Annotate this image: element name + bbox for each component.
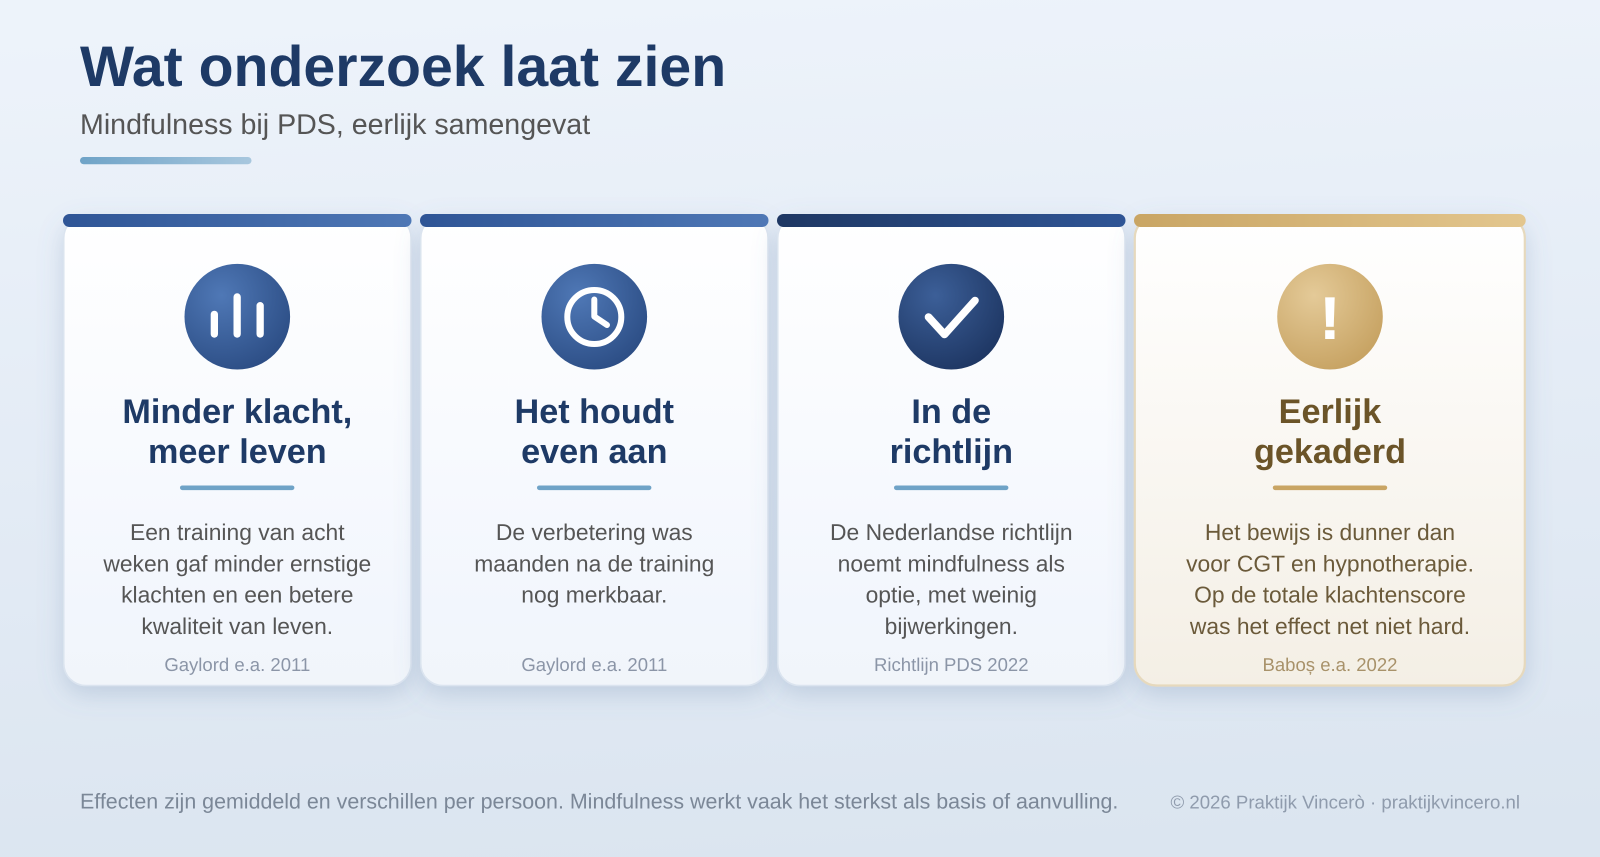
citation: Gaylord e.a. 2011	[164, 654, 310, 675]
body text: nog merkbaar.	[521, 582, 667, 608]
body text: weken gaf minder ernstige	[102, 550, 371, 576]
accent bar	[80, 157, 252, 164]
card heading: In de	[911, 393, 991, 431]
subtitle: Mindfulness bij PDS, eerlijk samengevat	[80, 109, 590, 141]
divider	[894, 486, 1008, 490]
card heading: Minder klacht,	[122, 393, 352, 431]
citation: Baboș e.a. 2022	[1263, 654, 1397, 675]
card top bar	[1134, 214, 1526, 227]
card heading: gekaderd	[1254, 433, 1406, 471]
body text: kwaliteit van leven.	[141, 613, 333, 639]
body text: noemt mindfulness als	[838, 550, 1065, 576]
card background	[778, 216, 1125, 686]
icon: bar chart	[184, 264, 290, 370]
body text: was het effect net niet hard.	[1189, 613, 1470, 639]
panel: het houdt even aan	[420, 214, 768, 686]
body text: maanden na de training	[474, 550, 714, 576]
title: Wat onderzoek laat zien	[80, 35, 726, 99]
icon: exclamation mark: !	[1320, 286, 1340, 352]
card top bar	[63, 214, 412, 227]
icon: check mark	[898, 264, 1004, 370]
body text: Op de totale klachtenscore	[1194, 582, 1466, 608]
body text: optie, met weinig	[866, 582, 1037, 608]
card top bar	[777, 214, 1126, 227]
footer credit: © 2026 Praktijk Vincerò · praktijkvincero.nl	[1170, 792, 1520, 813]
divider	[180, 486, 294, 490]
citation: Gaylord e.a. 2011	[521, 654, 667, 675]
body text: voor CGT en hypnotherapie.	[1186, 550, 1474, 576]
card heading: meer leven	[148, 433, 327, 471]
card heading: even aan	[521, 433, 667, 471]
body text: bijwerkingen.	[885, 613, 1018, 639]
body text: klachten en een betere	[121, 582, 354, 608]
card top bar	[420, 214, 768, 227]
body text: De verbetering was	[496, 519, 693, 545]
card background	[1135, 216, 1525, 686]
icon: exclamation mark	[1277, 264, 1383, 370]
divider	[1273, 486, 1387, 490]
body text: Een training van acht	[130, 519, 345, 545]
citation: Richtlijn PDS 2022	[874, 654, 1029, 675]
card heading: Eerlijk	[1279, 393, 1382, 431]
card background	[421, 216, 768, 686]
card background	[64, 216, 411, 686]
panel: minder klacht	[63, 214, 412, 686]
icon: clock	[542, 264, 647, 370]
card heading: Het houdt	[515, 393, 674, 431]
body text: Het bewijs is dunner dan	[1205, 519, 1455, 545]
panel: in de richtlijn	[777, 214, 1126, 686]
card heading: richtlijn	[890, 433, 1013, 471]
panel: eerlijk gekaderd	[1134, 214, 1526, 686]
footer note: Effecten zijn gemiddeld en verschillen per persoon. Mindfulness werkt vaak het sterkst als basis of aanvulling.	[80, 789, 1118, 813]
body text: De Nederlandse richtlijn	[830, 519, 1073, 545]
divider	[537, 486, 651, 490]
